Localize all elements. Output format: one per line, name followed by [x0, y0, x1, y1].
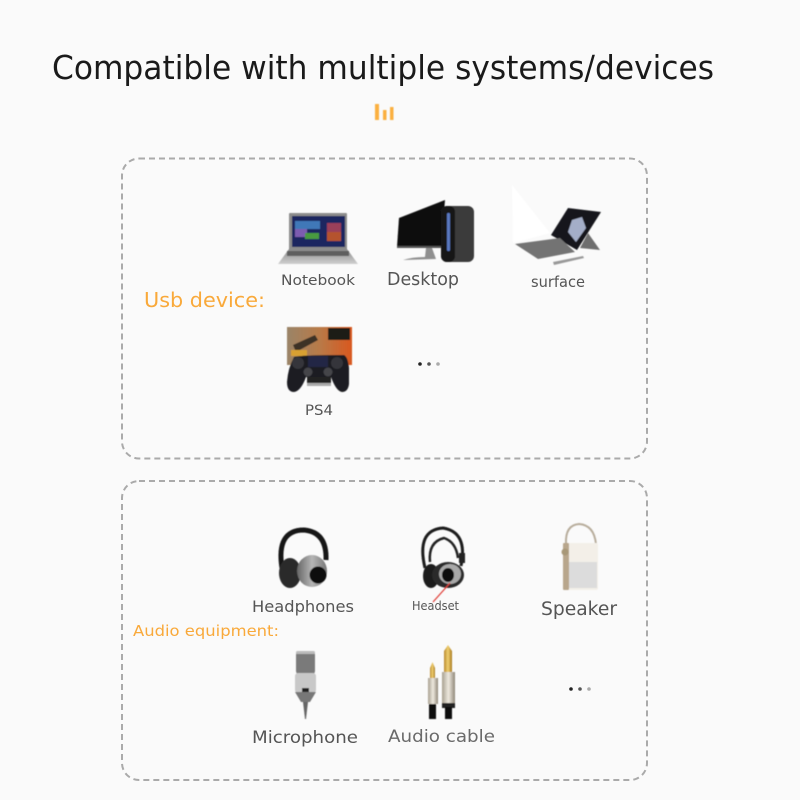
more dots: usb [418, 362, 440, 366]
icon: audio cable [428, 645, 455, 719]
label: speaker: Speaker [541, 599, 617, 620]
icon: headphones [279, 530, 327, 588]
icon: surface [512, 185, 601, 265]
icon: speaker [562, 524, 598, 590]
more dots: audio [569, 687, 591, 691]
usb heading: Usb device: [144, 288, 265, 312]
title: Compatible with multiple systems/devices [52, 48, 714, 87]
label: ps4: PS4 [305, 403, 333, 419]
panel: usb devices [122, 158, 647, 458]
icon: orange bars [375, 104, 394, 120]
label: surface: surface [531, 273, 585, 291]
panel: audio equipment [122, 481, 647, 780]
audio heading: Audio equipment: [133, 622, 279, 640]
label: microphone: Microphone [252, 728, 358, 748]
icon: headset [423, 528, 465, 602]
label: headphones: Headphones [252, 597, 354, 616]
label: desktop: Desktop [387, 270, 459, 290]
label: audio cable: Audio cable [388, 727, 495, 747]
label: notebook: Notebook [281, 273, 356, 289]
icon: desktop [397, 200, 474, 262]
icon: microphone [295, 651, 316, 719]
icon: ps4 controller [287, 327, 352, 392]
label: headset: Headset [412, 599, 459, 613]
icon: notebook [278, 213, 358, 264]
